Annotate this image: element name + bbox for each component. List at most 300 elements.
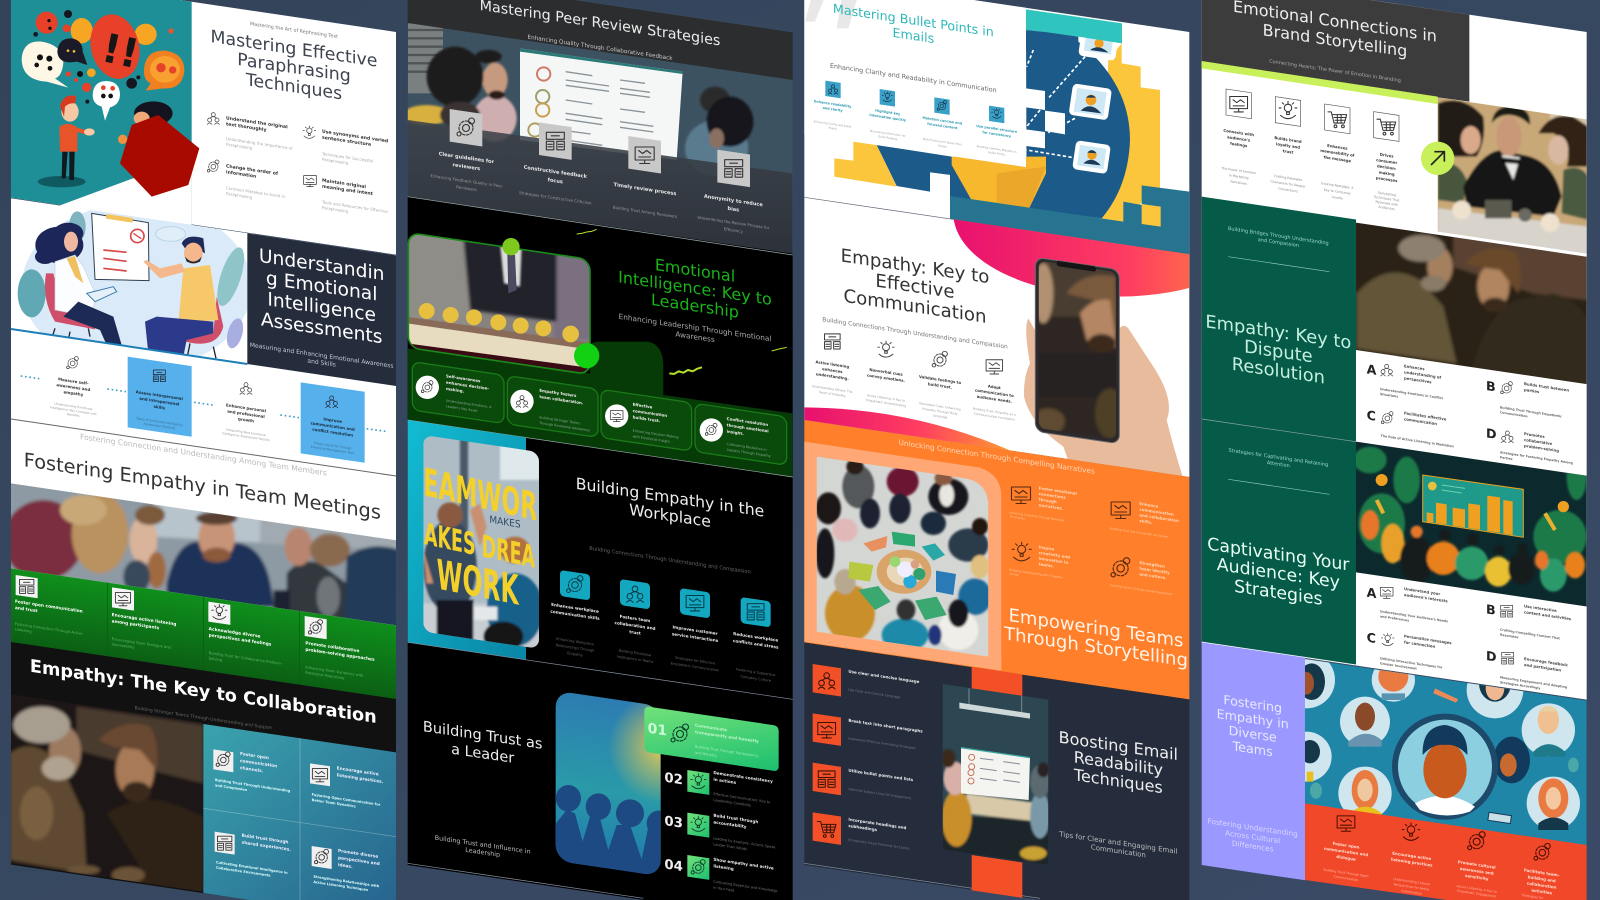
heading: Building Trust and Influence in <box>435 835 531 856</box>
slide: Boosting Email Readability Techniques <box>804 642 1189 900</box>
point: promote cultural awareness: Promote cultural <box>1458 859 1496 870</box>
card: effective communication: Effective <box>633 402 653 410</box>
point: readability: Points <box>829 126 837 131</box>
point: promote diverse perspectives: perspectives and <box>338 855 380 867</box>
item: change the order: Common Mistakes to Avoid in <box>226 185 285 199</box>
point: enhance communication: Building Trust and Connection via Stories <box>1110 526 1168 539</box>
dark header <box>1202 0 1469 104</box>
white content panel <box>804 0 1026 167</box>
point: enhance communication: and collaboration <box>1139 512 1179 523</box>
point: timely review: Timely review process <box>614 182 676 197</box>
item 01 highlighted <box>644 706 779 772</box>
item B <box>1486 379 1569 424</box>
item D: D <box>1486 426 1497 443</box>
point: foster open communication: Foster open <box>1333 841 1360 850</box>
point: team-building activities: Strategies for <box>1522 893 1544 900</box>
item A: audience's interests <box>1404 592 1448 604</box>
point: inspire creativity: Building Understanding with Empathy <box>1009 568 1063 580</box>
point: consumer decisions: Resonate with <box>1375 200 1398 207</box>
card: empathy fosters collaboration: Through Emotional Awareness <box>538 421 590 432</box>
item 04: Cultivating Expertise and Knowledge <box>713 880 778 893</box>
point: active listening <box>812 334 853 399</box>
office photo with red blocks <box>940 667 1050 898</box>
point: reduces conflicts: Reduces workplace <box>733 631 778 643</box>
point: emotional connections: Techniques <box>1008 514 1025 521</box>
point: enhance communication: skills. <box>1139 518 1153 525</box>
heading: Paraphrasing <box>237 50 351 87</box>
point: anonymity: Efficiency <box>724 226 744 234</box>
point: adapt communication: audience needs. <box>977 394 1012 404</box>
teamwork photo: MAKES <box>489 514 521 531</box>
step: improve communication <box>301 382 365 463</box>
item D <box>1486 426 1573 470</box>
point: foster open communication: Building Trust Through Open <box>1324 868 1368 878</box>
point: memorability: Key to Consumer <box>1324 188 1352 196</box>
point: connects with feelings: Connects with <box>1223 128 1254 137</box>
point: highlight key information: Highlight key <box>875 108 901 116</box>
card: foster open communication <box>15 575 83 641</box>
item 03: Leading by Example: Actions Speak <box>713 836 776 850</box>
item: understand the original text: text thoroughly <box>226 121 266 133</box>
lilac title panel: Differences <box>1232 839 1274 854</box>
card: self-awareness: Self-awareness <box>446 373 481 383</box>
card: promote collaborative problem solving: problem-solving approaches <box>305 647 375 663</box>
point: reduces conflicts: conflicts and stress <box>733 638 779 650</box>
point: build trust through shared experiences: Build trust through <box>242 833 288 846</box>
point: validate feelings: build trust. <box>928 381 953 390</box>
email tip 4: Incorporate Visual Elements for Clarity <box>848 838 909 851</box>
email tip 4 <box>813 812 909 851</box>
point: consumer decisions: consumer <box>1376 157 1397 165</box>
title panel <box>247 233 396 386</box>
point: active listening: Active listening <box>816 359 849 369</box>
slide: Fostering Empathy in Team Meetings <box>0 419 407 699</box>
item D: D <box>1486 649 1497 666</box>
card: encourage active listening: Encouraging Open Dialogue and <box>112 637 171 650</box>
card: encourage active listening: among participants <box>112 618 160 631</box>
point: anonymity: bias <box>728 206 739 214</box>
card: conflict resolution: Cultivating Resilience in <box>727 442 767 452</box>
point: active listening: understanding. <box>816 371 849 381</box>
step: enhance personal growth <box>222 383 270 442</box>
heading: Building Empathy in the <box>576 474 764 521</box>
item C: Personalize messages <box>1404 633 1452 645</box>
point: nonverbal cues: Empathetic Understanding <box>866 398 906 408</box>
item 02: Demonstrate consistency <box>713 770 773 784</box>
email tip 4: subheadings <box>848 823 878 832</box>
point: consumer decisions: Drives <box>1380 152 1394 159</box>
dark header: Brand Storytelling <box>1263 20 1407 61</box>
item C: Utilizing Interactive Techniques for <box>1380 656 1443 670</box>
geometric graphic <box>834 9 1189 255</box>
item: maintain original meaning <box>304 176 388 220</box>
heading: Empowering Teams <box>1009 605 1183 652</box>
point: team-building activities: activities <box>1531 887 1553 896</box>
item A: Understanding Emotions in Conflict <box>1380 387 1443 400</box>
lilac title panel: Fostering <box>1223 693 1282 717</box>
item D: collaborative <box>1524 437 1553 446</box>
item 02: Effective Communication: Key to <box>713 792 770 804</box>
item B: Building Trust Through Empathetic <box>1500 405 1562 419</box>
card: effective communication: Enhancing Decision-Making <box>633 429 678 439</box>
illustration: presentation with bar chart in a jungle <box>1353 437 1590 610</box>
card: effective communication: builds trust. <box>633 414 661 423</box>
arrow badge <box>1421 142 1454 175</box>
title panel: Measuring and Enhancing Emotional Awareness <box>250 342 393 370</box>
point: promote cultural awareness: Empathetic Engagement <box>1457 889 1497 899</box>
point: adapt communication: Adapt <box>988 383 1001 390</box>
point: parallel structure <box>976 106 1018 158</box>
heading: Leadership <box>465 847 500 859</box>
green title panel: and Compassion <box>1258 237 1299 249</box>
point: workplace communication: Enhancing Workplace <box>556 637 594 646</box>
point: consumer decisions: Techniques That <box>1373 195 1400 203</box>
point: memorability <box>1320 104 1355 202</box>
card: encourage active listening: Encourage active listening <box>112 612 176 628</box>
point: customer service: Empathetic Communication <box>671 661 719 673</box>
hand holding phone <box>1024 258 1182 476</box>
heading: Emotional <box>655 255 735 286</box>
card: effective communication: communication <box>633 408 667 418</box>
item 01 highlighted: transparently and honestly <box>695 729 759 744</box>
step: enhance personal growth: Intelligence Assessment Results <box>222 431 270 442</box>
slide: Emotional Connections in Brand Storytelling <box>1202 0 1590 263</box>
point: foster open communication: dialogue <box>1336 854 1356 862</box>
point: build trust through shared experiences: Collaborative Environments <box>216 866 270 878</box>
item 03: Louder Than Words <box>713 842 747 851</box>
point: clear guidelines: Reviewers <box>456 184 477 192</box>
point: team collaboration: Intelligence in Teams <box>617 655 653 664</box>
item: maintain original meaning: Paraphrasing <box>322 205 349 214</box>
point: parallel structure: Avoiding Common Mistakes in <box>977 144 1017 154</box>
team photo <box>11 484 396 626</box>
point: clear guidelines <box>430 109 503 196</box>
point: parallel structure: for consistency <box>982 130 1012 139</box>
point: emotional connections: connections <box>1039 491 1066 500</box>
heading: Building Connections Through Understanding and Compassion <box>822 316 1008 351</box>
dark header: Connecting Hearts: The Power of Emotion in Branding <box>1269 59 1401 84</box>
heading <box>211 21 377 110</box>
point: emotional connections: Unlocking Creativity Through Narrative <box>1009 510 1065 522</box>
point: adapt communication: communication to <box>975 387 1014 398</box>
card: foster open communication: Listening <box>15 627 32 634</box>
item B: Crafting Compelling Content That <box>1500 628 1560 641</box>
point: strengthen identity: and culture. <box>1139 571 1167 580</box>
green title panel: Attention <box>1267 460 1290 469</box>
item A: Understanding Your Audience's Needs <box>1380 609 1448 623</box>
connector dots <box>21 376 385 431</box>
point: customer service <box>671 588 719 673</box>
point: clear guidelines: reviewers <box>453 162 480 172</box>
point: brand loyalty: Connections <box>1278 187 1298 193</box>
item A <box>1367 586 1448 628</box>
item C: C <box>1367 408 1376 425</box>
lilac title panel: Across Cultural <box>1225 828 1280 845</box>
illustration: portraits in circles <box>1305 659 1586 845</box>
item B: Resonates <box>1500 633 1519 639</box>
point: promote cultural awareness <box>1457 832 1497 899</box>
slide: Empowering Teams Through Storytelling <box>804 420 1189 700</box>
point: readability: and clarity <box>823 106 844 113</box>
point: foster open communication channels <box>213 749 291 799</box>
step: measure self-awareness: Understanding Emotional <box>54 402 92 411</box>
item A: Understand your <box>1404 586 1440 596</box>
step: improve communication: conflict resolution <box>312 427 353 438</box>
illustration: speech bubbles and two people <box>22 9 184 187</box>
item C: Greater Involvement <box>1380 661 1417 671</box>
point: enhance communication <box>1110 501 1179 539</box>
point: encourage active listening practices: Fostering Open Communication for <box>312 793 381 807</box>
item A: A <box>1367 362 1377 379</box>
point: workplace communication <box>550 570 600 659</box>
point: workplace communication: communication skills <box>550 609 600 621</box>
point: timely review <box>613 136 677 219</box>
green title panel <box>1202 197 1356 442</box>
point: encourage active listening: Perspectives for Better <box>1394 882 1430 892</box>
card: self-awareness: Leader's Key Asset <box>446 404 478 413</box>
email tip 1 <box>813 664 920 699</box>
step: enhance personal growth: growth <box>238 416 254 424</box>
point: promote cultural awareness: Active Listening: A Key to <box>1457 884 1497 894</box>
point: encourage active listening: listening practices <box>1391 857 1433 868</box>
point: connects with feelings: The Power of Emotion <box>1220 166 1256 175</box>
heading: Boosting Email <box>1059 728 1178 764</box>
point: enhance communication: communication <box>1139 507 1174 517</box>
heading: a Leader <box>451 741 514 767</box>
email tip 2 <box>813 713 923 750</box>
point: validate feelings: Empathy Through Body <box>922 407 958 416</box>
item C <box>1367 408 1455 449</box>
heading: Intelligence: Key to <box>618 267 772 309</box>
item D: and participation <box>1524 662 1561 673</box>
point: reduces conflicts: Fostering a Supportive <box>736 667 775 677</box>
point: connects with feelings: feelings <box>1230 141 1248 148</box>
green accent circles <box>502 238 599 368</box>
card: effective communication: with Emotional Insight <box>633 434 670 444</box>
teal grid with four points <box>203 724 396 900</box>
point: anonymity <box>697 150 770 238</box>
item 02 <box>664 770 773 810</box>
card: conflict resolution: Leaders Through Empathy <box>727 448 771 458</box>
point: inspire creativity: innovation in <box>1039 556 1068 565</box>
item 04: in Your Field <box>713 886 734 893</box>
point: promote diverse perspectives: ideas. <box>338 862 353 870</box>
item: use synonyms: Techniques for Successful <box>321 151 373 164</box>
heading <box>618 250 772 353</box>
card: self-awareness: Understanding Emotions: A <box>446 399 492 409</box>
item: change the order: Change the order of <box>226 163 279 177</box>
point: emotional connections: narratives. <box>1039 502 1064 511</box>
item 04: listening <box>713 863 734 871</box>
item C: The Role of Active Listening in Mediation <box>1381 434 1455 449</box>
heading: Workplace <box>629 500 711 531</box>
card: acknowledge diverse perspectives: Solving <box>209 656 222 662</box>
item: change the order: information <box>226 169 256 180</box>
slide: Building Empathy in the Workplace <box>408 420 793 700</box>
item B <box>1486 602 1572 646</box>
email tip 1: Use clear and concise language <box>848 669 920 684</box>
item 01 highlighted: 01 <box>648 721 667 740</box>
point: memorability: Evoking Nostalgia: A <box>1321 181 1354 190</box>
step: improve communication: communication and <box>311 420 355 432</box>
item D <box>1486 649 1568 694</box>
point: validate feelings: Language <box>933 413 948 419</box>
illustration: speech bubbles and two people: !! <box>98 25 143 78</box>
heading: Tips for Clear and Engaging Email <box>1058 829 1177 856</box>
point: constructive feedback: Constructive feedback <box>524 165 588 180</box>
heading: Mastering Bullet Points in <box>833 2 994 41</box>
gradient arc and wave <box>804 219 1190 450</box>
card: empathy fosters collaboration: Building Stronger Teams <box>539 415 580 425</box>
item: maintain original meaning: Tools and Resources for Effective <box>321 199 388 214</box>
card: empathy fosters collaboration <box>507 376 598 437</box>
point: encourage active listening practices: Better Team Dynamics <box>312 798 356 809</box>
green title panel: Building Bridges Through Understanding <box>1228 226 1329 247</box>
item C: communication <box>1404 416 1437 426</box>
green panel with four cards <box>11 568 396 699</box>
slide: Mastering Bullet Points in Emails <box>804 0 1189 255</box>
point: inspire creativity: Inspire <box>1039 544 1055 552</box>
photo: smiling balls <box>408 233 591 374</box>
point: customer service: service interactions <box>672 631 719 643</box>
red band with four points <box>1305 803 1587 900</box>
item A: Enhances <box>1404 363 1425 371</box>
heading <box>822 245 1008 351</box>
dark green band <box>408 342 792 480</box>
item: understand the original text <box>207 113 293 157</box>
card: acknowledge diverse perspectives <box>208 602 283 671</box>
point: inspire creativity: creativity and <box>1039 550 1070 560</box>
step: assess interpersonal skills: and intrapersonal <box>139 396 180 407</box>
step: measure self-awareness: Benefits <box>67 412 80 418</box>
item B: Builds trust between <box>1524 381 1569 393</box>
point: connects with feelings: audience's <box>1227 134 1251 143</box>
point: active listening: enhances <box>822 366 843 374</box>
point: nonverbal cues: convey emotions. <box>867 373 905 383</box>
step: improve communication: Emotional Management Tools <box>311 445 355 455</box>
item: maintain original meaning: Maintain original <box>322 178 366 190</box>
item A: A <box>1367 586 1377 602</box>
point: highlight key information: information quickly <box>869 113 907 122</box>
point: encourage active listening practices <box>310 763 384 812</box>
item B: Communication <box>1500 410 1528 419</box>
step: enhance personal growth: and professional <box>227 409 265 419</box>
heading: Building Connections Through Understanding and Compassion <box>589 546 751 576</box>
card: conflict resolution: insight. <box>727 429 744 436</box>
point: anonymity: Anonymity to reduce <box>704 194 763 208</box>
photo: three people at table <box>1438 98 1587 254</box>
point: adapt communication <box>973 360 1016 422</box>
step: improve communication: Improve <box>323 416 342 424</box>
point: constructive feedback: Strategies for Constructive Criticism <box>519 190 592 206</box>
point: concise content: Usage <box>938 143 947 149</box>
step: assess interpersonal skills: Assessment Methods <box>144 422 176 430</box>
card: self-awareness: making. <box>446 386 465 394</box>
point: connects with feelings <box>1220 89 1256 187</box>
point: parallel structure: Use parallel structure <box>976 124 1018 134</box>
point: validate feelings: Nonverbal Cues: Enhancing <box>919 401 961 411</box>
card: acknowledge diverse perspectives: Acknowledge diverse <box>209 626 261 640</box>
step: assess interpersonal skills: skills <box>154 404 166 411</box>
point: build trust through shared experiences <box>215 832 291 880</box>
point: inspire creativity <box>1009 542 1070 584</box>
item: maintain original meaning: meaning and intent <box>322 184 374 197</box>
point: brand loyalty <box>1270 97 1306 195</box>
lilac title panel <box>1202 642 1305 880</box>
item 04 <box>664 855 778 899</box>
point: team collaboration: Building Emotional <box>619 649 651 657</box>
point: brand loyalty: loyalty and <box>1276 141 1300 150</box>
heading: Building Trust as <box>423 718 542 753</box>
column 3 of slides <box>804 0 1190 900</box>
item: change the order: Paraphrasing <box>226 191 253 200</box>
point: nonverbal cues: Active Listening: A Key to <box>867 393 905 403</box>
item A: understanding of <box>1404 369 1442 380</box>
point: encourage active listening: Collaboration <box>1401 889 1422 896</box>
point: team collaboration: collaboration and <box>614 620 656 631</box>
photo: two men talking <box>7 692 207 895</box>
email tip 2: Implement Effective Formatting Strategies <box>848 736 916 750</box>
heading <box>1058 728 1178 864</box>
heading: Communication <box>1091 842 1146 859</box>
lilac title panel: Empathy in <box>1217 707 1289 733</box>
item C: for connection <box>1404 639 1435 649</box>
point: memorability: Loyalty <box>1332 195 1343 201</box>
point: encourage active listening practices: listening practices. <box>337 772 384 785</box>
point: inspire creativity: Stories <box>1009 572 1020 577</box>
point: brand loyalty: Crafting Relatable <box>1274 174 1302 182</box>
point: concise content: Maintain concise and <box>922 116 963 126</box>
point: anonymity: Streamlining the Review Process for <box>697 215 770 230</box>
point: encourage active listening: Understanding Cultural <box>1393 877 1430 886</box>
point: build trust through shared experiences: Cultivating Emotional Intelligence in <box>216 860 288 875</box>
point: foster open communication: Communication <box>1334 875 1358 882</box>
item 02: 02 <box>664 771 683 788</box>
point: validate feelings: Validate feelings to <box>919 374 961 385</box>
point: adapt communication: Communication Foundation <box>974 412 1015 422</box>
item B: B <box>1486 379 1496 395</box>
point: adapt communication: Building Trust: Empathy as a <box>973 407 1016 417</box>
teamwork photo <box>423 436 539 648</box>
green title panel: Audience: Key <box>1217 555 1340 593</box>
point: memorability: memorability of <box>1320 148 1355 158</box>
point: team collaboration: Fosters team <box>620 614 651 623</box>
step: measure self-awareness: awareness and <box>56 382 90 392</box>
point: consumer decisions: making <box>1379 170 1395 177</box>
point: brand loyalty: Characters for Deeper <box>1270 179 1306 189</box>
lilac title panel: Diverse <box>1229 724 1277 746</box>
heading: Fostering Empathy in Team Meetings <box>24 448 381 524</box>
step: improve communication: Enhancing Skills Through <box>314 441 352 450</box>
point: memorability: Enhances <box>1327 143 1348 151</box>
point: validate feelings <box>919 351 961 421</box>
title panel: g Emotional <box>266 268 377 306</box>
point: foster open communication channels: channels. <box>240 765 264 774</box>
point: encourage active listening: Encourage active <box>1392 850 1431 861</box>
title panel: Assessments <box>261 309 382 348</box>
card: promote collaborative problem solving <box>305 616 375 683</box>
item C <box>1367 631 1452 675</box>
point: workplace communication: Relationships Through <box>556 643 594 653</box>
red hexagon <box>120 115 199 197</box>
slide: Emotional Intelligence Key to Leadership <box>407 197 793 480</box>
item C: C <box>1367 631 1376 647</box>
item A <box>1367 362 1443 405</box>
point: connects with feelings: in Marketing <box>1229 173 1248 180</box>
point: brand loyalty: trust <box>1283 148 1293 155</box>
slide: Understanding Emotional Intelligence Assessments <box>0 197 396 478</box>
column 1 of slides <box>0 0 407 900</box>
